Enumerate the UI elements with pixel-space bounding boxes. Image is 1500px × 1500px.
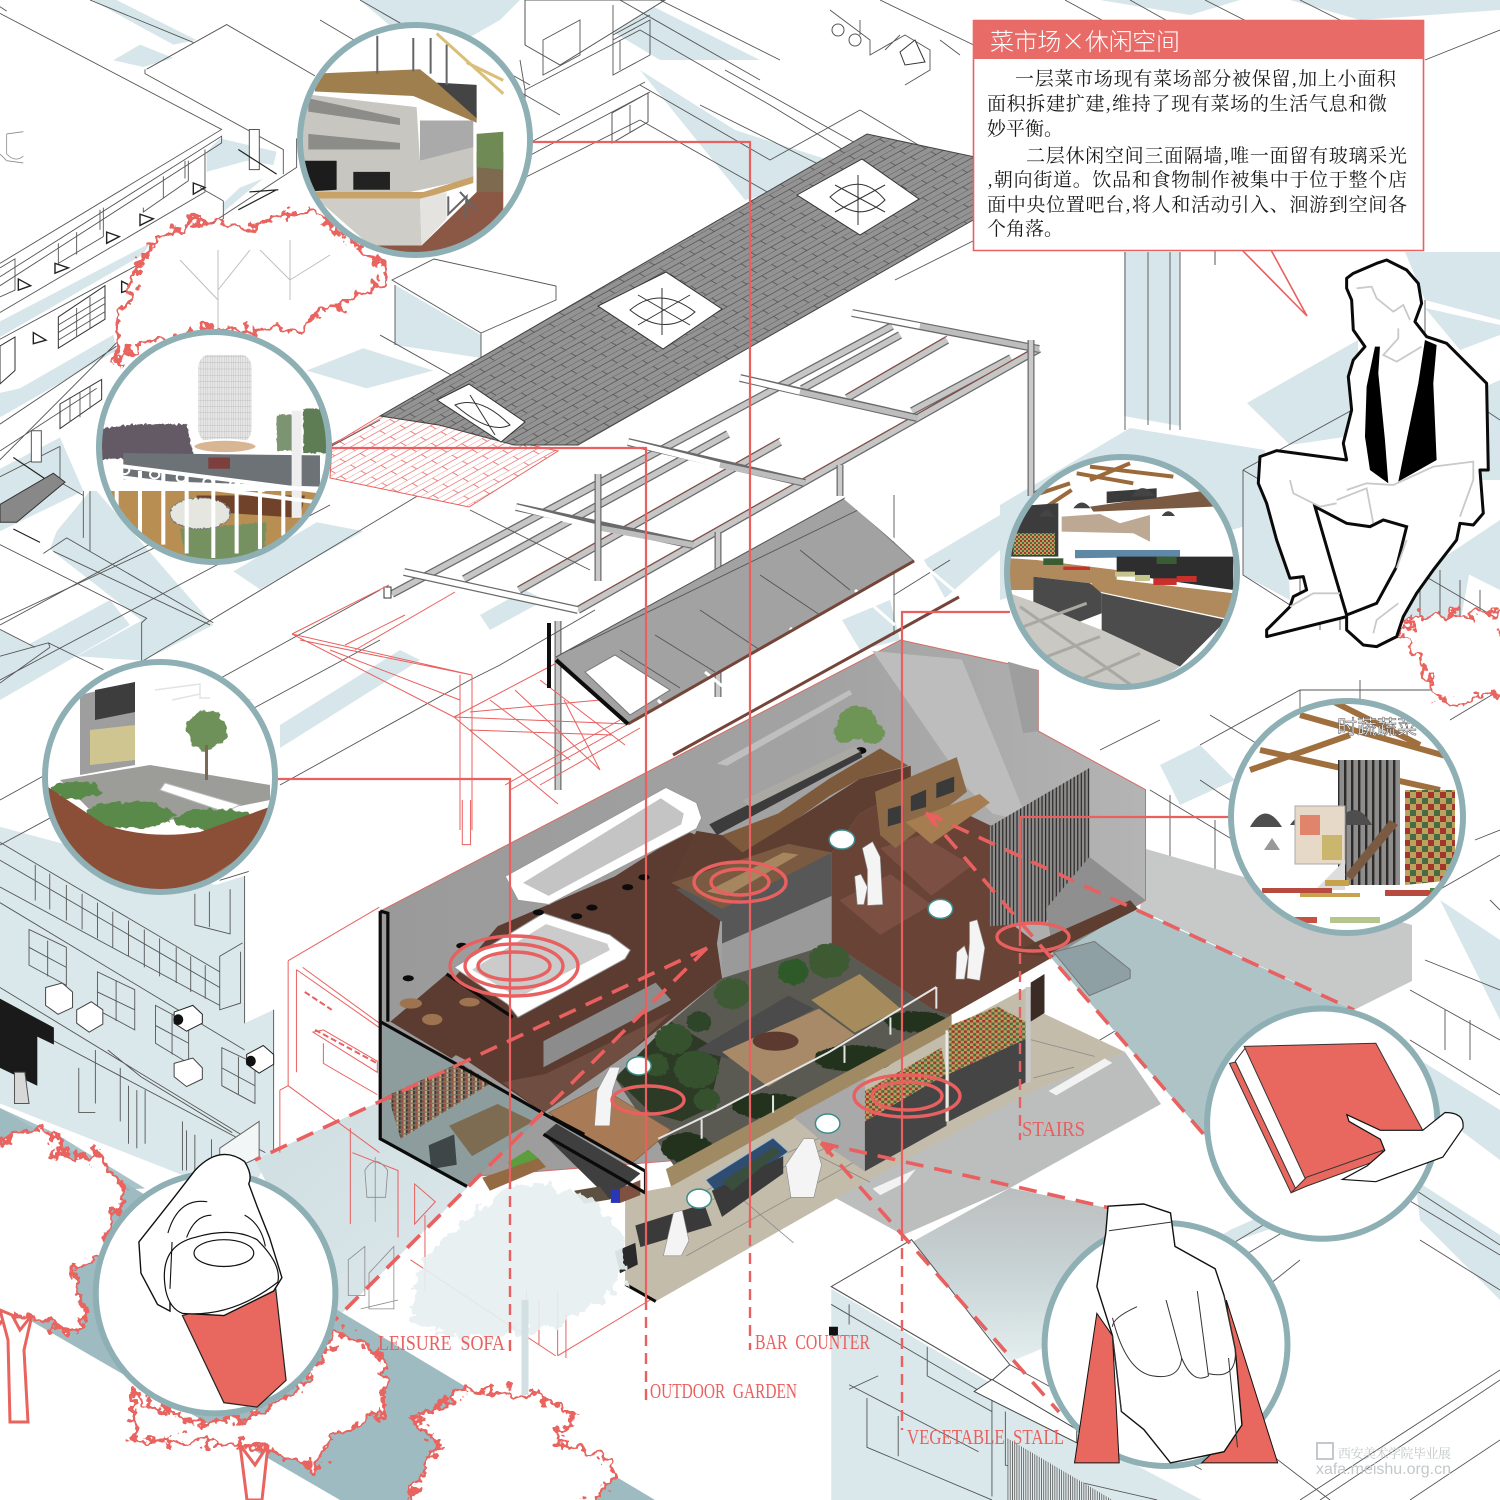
- centre garden bed: [615, 1022, 722, 1121]
- brown produce table: [482, 1158, 546, 1191]
- fire pit: [753, 1032, 799, 1051]
- black ceiling lights: [403, 747, 875, 981]
- slatted screen: [990, 768, 1089, 926]
- bar top timber: [707, 853, 799, 896]
- grey stand: [574, 1186, 610, 1204]
- left dining floor: [390, 974, 508, 1059]
- sight-line rays: [255, 813, 1354, 1412]
- cup lid: [164, 1232, 278, 1314]
- wood tables: [906, 794, 990, 844]
- lower dark floor plate: [543, 1124, 640, 1199]
- back and side wall: [380, 640, 1146, 1178]
- red wire pergola: [292, 585, 640, 830]
- leader: outdoor garden: [330, 448, 646, 1299]
- dark counter block: [676, 853, 832, 944]
- white vault upper: [505, 787, 702, 905]
- grey ground block behind stairs: [1140, 849, 1412, 1010]
- book page edge: [1229, 1061, 1307, 1193]
- street stencil markings: [873, 1059, 1112, 1195]
- circle: bird cage garden: [99, 332, 329, 571]
- context buildings: top centre and roofs: [0, 0, 1500, 620]
- lounge timber deck: [722, 1009, 855, 1087]
- planter rail: [658, 987, 936, 1139]
- bag strap left: [1075, 1313, 1119, 1463]
- label: outdoor garden: OUTDOOR GARDEN: [650, 1379, 797, 1403]
- vault upper basin: [523, 798, 684, 896]
- watermark: 西安美术学院毕业展: [1338, 1443, 1451, 1462]
- grey clothing folds: [1290, 287, 1473, 633]
- brown floor left upper: [390, 831, 722, 1113]
- lower red tile roof: [330, 416, 558, 507]
- cone of sight: coffee cup: [255, 948, 707, 1320]
- ghost tree in front of model: [410, 1180, 625, 1340]
- fingers: [168, 1201, 265, 1289]
- label: leisure sofa: LEISURE SOFA: [378, 1331, 506, 1355]
- brown floor rear gallery: [671, 766, 911, 883]
- grey lower block: [722, 896, 832, 978]
- leader: vegetable stall: [902, 612, 1010, 1230]
- lighter lower floor: [503, 1013, 671, 1113]
- lid top: [194, 1240, 254, 1266]
- ground shop floor stall dark left: [865, 1074, 947, 1171]
- red wire shop front ghost: [280, 800, 650, 1358]
- label: vegetable stall: VEGETABLE STALL: [907, 1425, 1064, 1449]
- roof skylights: [437, 159, 919, 442]
- circle: book in hand: [1207, 1008, 1463, 1239]
- bag ring: [1045, 1223, 1287, 1466]
- rear planter wall: [709, 748, 862, 835]
- garden foliage: [642, 1023, 720, 1111]
- people silhouettes: [594, 842, 985, 1256]
- seated man figure: [1258, 260, 1488, 647]
- shop counters: [449, 1104, 533, 1156]
- body outline: [1258, 260, 1488, 647]
- label: stairs: STAIRS: [1022, 1117, 1085, 1141]
- black frame lines: [380, 911, 646, 1193]
- context buildings: right side: [1000, 250, 1500, 1500]
- stair landing grey: [1046, 857, 1146, 957]
- ghost tree trunk: [522, 1300, 528, 1395]
- curved terrace: [722, 748, 908, 853]
- black floor edge: [625, 1284, 656, 1301]
- furniture timber: [875, 757, 967, 848]
- black small stand: [615, 1243, 638, 1273]
- circle: bar interior: [298, 25, 530, 263]
- front green produce: [508, 1150, 538, 1176]
- cone of sight: bag: [912, 1188, 1108, 1362]
- straw deck: [811, 974, 901, 1032]
- finger lines: [1109, 1222, 1237, 1447]
- shelf goods left: [865, 1048, 947, 1121]
- stall vegetables: [722, 1147, 781, 1191]
- dark shaft on wall: [1008, 662, 1038, 733]
- leader: bar counter: [530, 142, 750, 1217]
- shelf goods right: [949, 1006, 1026, 1074]
- street pavement: [625, 987, 1125, 1301]
- circle: outdoor garden planter: [40, 662, 280, 900]
- leader: leisure sofa: [277, 779, 510, 1178]
- planter greenery: [661, 1011, 947, 1162]
- book ring: [1207, 1008, 1437, 1239]
- inner leg: [1315, 507, 1407, 615]
- bag strap right: [1202, 1300, 1278, 1463]
- cone of sight: book: [926, 813, 1354, 1137]
- book cover: [1244, 1043, 1423, 1182]
- hand fist: [1097, 1204, 1242, 1463]
- brown right hall: [832, 787, 1054, 1017]
- shop table: [429, 1134, 457, 1169]
- grey street ground: [830, 1052, 1161, 1235]
- lower timber deck: [549, 1087, 671, 1165]
- watermark: xafa.meishu.org.cn: [1316, 1461, 1451, 1478]
- leader: stairs: [1020, 817, 1232, 935]
- circle: vegetable stall interior: [1000, 457, 1237, 693]
- circle: bag in hand: [1045, 1204, 1287, 1466]
- floor light patches: [839, 835, 972, 935]
- planter wall gravel: [742, 746, 860, 807]
- pavement joints: [656, 1039, 1094, 1256]
- context building: left street facade: [0, 827, 274, 1197]
- shop interior ground floor: [383, 1026, 546, 1186]
- callout body text: 面中央位置吧台,将人和活动引入、洄游到空间各: [987, 190, 1407, 217]
- front building lower right: [829, 1240, 1202, 1500]
- red cup body: [182, 1289, 286, 1407]
- book bottom edge: [1291, 1150, 1383, 1193]
- callout body text: 妙平衡。: [987, 114, 1063, 141]
- ground shop dark right: [949, 1039, 1026, 1121]
- info bubbles: [627, 830, 953, 1208]
- garden base: [615, 944, 952, 1169]
- tree on terrace: [833, 706, 885, 744]
- callout tail: [1242, 250, 1307, 316]
- callout header bar: [973, 20, 1424, 59]
- grey strip on wall: [717, 690, 852, 766]
- grey tile roof: [380, 134, 975, 445]
- callout body text: 个角落。: [987, 214, 1063, 241]
- context building: white box beside roof: [392, 259, 556, 333]
- red target ellipses: [450, 862, 1069, 1117]
- sloped glazed roof: [549, 498, 966, 755]
- callout body text: 一层菜市场现有菜场部分被保留,加上小面积: [1015, 64, 1397, 91]
- callout body text: ,朝向街道。饮品和食物制作被集中于位于整个店: [987, 165, 1407, 192]
- cup ring: [96, 1173, 335, 1413]
- label: bar counter: BAR COUNTER: [755, 1330, 870, 1354]
- long planter ledge: [666, 1015, 952, 1186]
- road: [0, 1108, 655, 1500]
- circle: coffee cup in hand: [96, 1154, 335, 1413]
- produce stall near: [635, 1204, 712, 1247]
- book spine white: [1235, 1048, 1309, 1188]
- callout body text: [987, 64, 1407, 241]
- vest right: [1398, 340, 1437, 482]
- circle: stairs market interior: [1231, 700, 1463, 933]
- garden upper foliage: [687, 944, 850, 1032]
- main building cutaway: [380, 640, 1146, 1301]
- callout body text: 二层休闲空间三面隔墙,唯一面留有玻璃采光: [1026, 141, 1407, 168]
- vault lower basin: [472, 924, 610, 998]
- dark brown slats below stairs: [1031, 974, 1044, 1022]
- callout title: 菜市场×休闲空间: [990, 22, 1180, 57]
- bar top: [671, 844, 832, 909]
- blue market stall: [706, 1138, 788, 1199]
- watermark: [1316, 1443, 1451, 1478]
- shelves: [388, 1063, 492, 1139]
- dining tables: [400, 998, 480, 1025]
- sofa lounge dark: [697, 996, 814, 1059]
- pergola upper frame: [0, 313, 1039, 845]
- grey vault lower: [454, 913, 630, 1017]
- dashed leader ends: [510, 935, 1020, 1430]
- white column mid: [946, 1030, 948, 1121]
- stair block: [1054, 941, 1130, 996]
- brown vending side: [620, 1180, 640, 1203]
- hand: [1342, 1112, 1463, 1182]
- stall dark base: [712, 1156, 783, 1217]
- context building: upper left block: [0, 0, 500, 683]
- grey path through upper floor: [543, 983, 671, 1067]
- blue vending: [611, 1190, 620, 1203]
- white column: [1026, 987, 1031, 1082]
- vest left: [1365, 347, 1388, 483]
- callout body text: 面积拆建扩建,维持了现有菜场的生活气息和微: [987, 89, 1387, 116]
- hand outline: [139, 1154, 282, 1316]
- callout panel: [973, 20, 1424, 250]
- pillar under planter: [793, 1078, 865, 1171]
- circle: stairs market interior: 时蔬蔬菜: [1337, 711, 1417, 740]
- brown handrail: [1013, 900, 1138, 957]
- light shafts on wall: [873, 651, 1028, 822]
- furniture seats: [888, 777, 954, 826]
